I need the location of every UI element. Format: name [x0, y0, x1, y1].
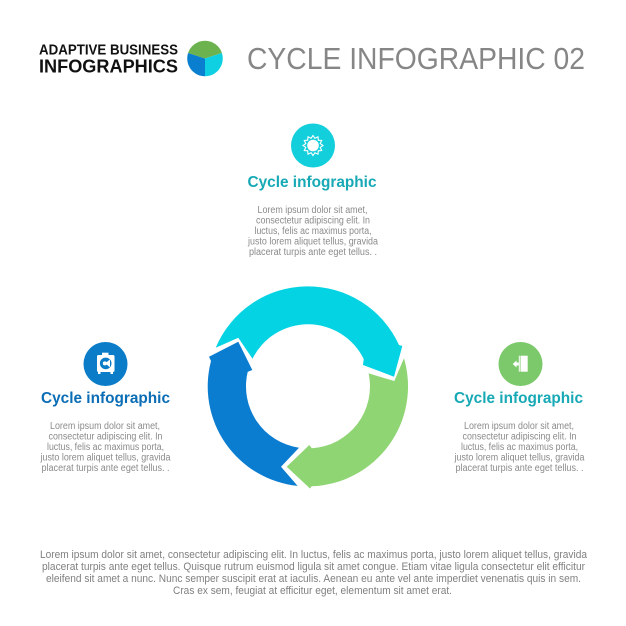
- brand pie icon: [187, 41, 223, 76]
- heading: Cycle infographic: [41, 390, 170, 407]
- text block: luctus, felis ac maximus porta,: [47, 442, 164, 453]
- text block: justo lorem aliquet tellus, gravida: [454, 452, 585, 464]
- footer paragraph: eleifend sit amet a nunc. Nunc semper suscipit erat at iaculis. Aenean eu ante vel ante imperdiet venenatis quis in sem.: [46, 573, 581, 585]
- text block: placerat turpis ante eget tellus. .: [456, 463, 584, 474]
- title: CYCLE INFOGRAPHIC 02: [247, 41, 585, 76]
- heading: Cycle infographic: [248, 174, 377, 191]
- text block: luctus, felis ac maximus porta,: [461, 442, 578, 453]
- text block: placerat turpis ante eget tellus. .: [42, 463, 170, 474]
- icon: sun badge: [291, 124, 335, 168]
- text block: consectetur adipiscing elit. In: [48, 432, 162, 442]
- text block: Lorem ipsum dolor sit amet,: [258, 205, 368, 216]
- left block: [40, 342, 171, 474]
- footer paragraph: placerat turpis ante eget tellus. Quisque rutrum euismod ligula sit amet congue. Etiam vitae ligula consectetur elit efficitur: [42, 561, 585, 573]
- text block: justo lorem aliquet tellus, gravida: [40, 452, 171, 464]
- icon: safe badge: [84, 342, 128, 386]
- text block: justo lorem aliquet tellus, gravida: [247, 236, 378, 248]
- arrow: blue: [208, 342, 299, 486]
- footer paragraph: Cras ex sem, feugiat at efficitur eget, elementum sit amet erat.: [173, 585, 452, 597]
- footer paragraph: Lorem ipsum dolor sit amet, consectetur adipiscing elit. In luctus, felis ac maximus porta, justo lorem aliquet tellus, gravida: [40, 549, 588, 561]
- brand heading: INFOGRAPHICS: [39, 56, 178, 76]
- arrow: green: [287, 358, 408, 488]
- heading: Cycle infographic: [454, 390, 583, 407]
- right block: [454, 342, 585, 474]
- brand heading: [39, 42, 178, 76]
- text block: Lorem ipsum dolor sit amet,: [50, 421, 160, 432]
- text block: consectetur adipiscing elit. In: [256, 216, 370, 226]
- text block: Lorem ipsum dolor sit amet,: [464, 421, 574, 432]
- cycle ring: [208, 286, 408, 488]
- arrow: cyan: [216, 286, 402, 377]
- text block: [454, 421, 585, 474]
- text block: consectetur adipiscing elit. In: [462, 432, 576, 442]
- footer paragraph: [40, 549, 588, 597]
- top block: [247, 124, 378, 258]
- text block: placerat turpis ante eget tellus. .: [249, 247, 377, 258]
- icon: door badge: [498, 342, 542, 386]
- text block: [247, 205, 378, 258]
- text block: luctus, felis ac maximus porta,: [254, 226, 372, 237]
- text block: [40, 421, 171, 474]
- brand heading: ADAPTIVE BUSINESS: [39, 42, 178, 58]
